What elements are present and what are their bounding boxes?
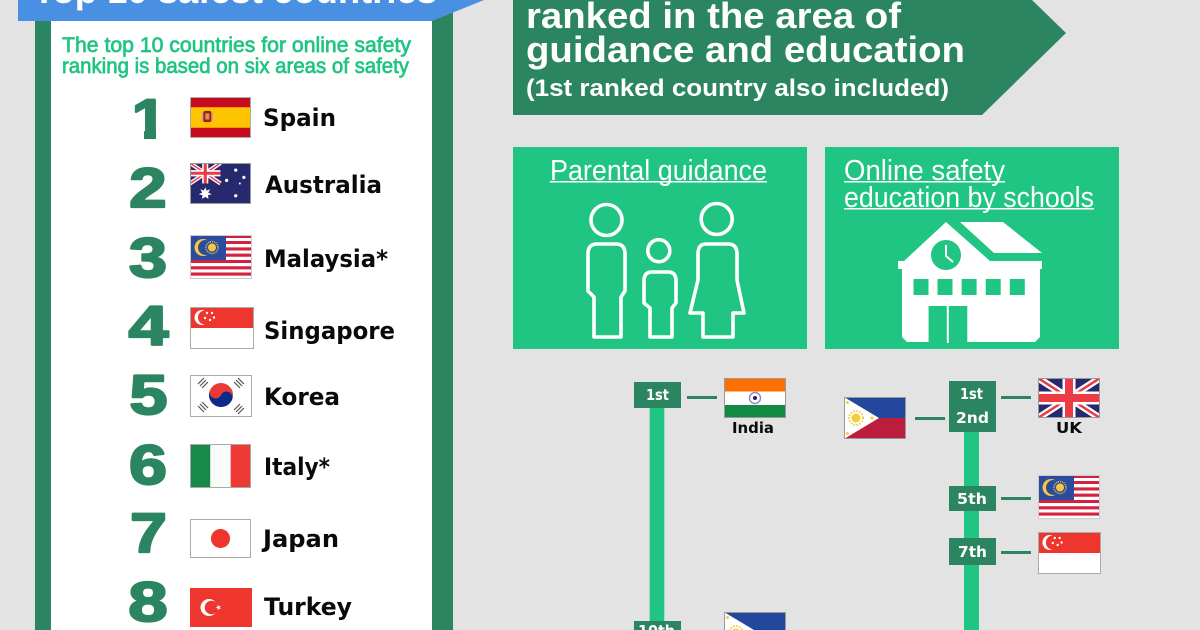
rank marker: 1st UK and 2nd Philippines: 2nd [956,409,989,427]
rank 5: Korea: Korea [264,383,340,411]
icon: school building [898,222,1042,343]
rank 4: Singapore: 4 [129,295,169,357]
heading arrow banner: guidance and education ranking: (1st ranked country also included) [526,75,949,102]
rank 5: Korea: 5 [130,364,167,427]
icon: family of three [588,204,744,337]
rank 5: Korea [130,364,340,427]
heading arrow banner: guidance and education ranking [513,0,1066,115]
rank 3: Malaysia: 3 [129,227,167,290]
rank 7: Japan: 7 [130,502,167,564]
rank 2: Australia [129,157,382,220]
rank 6: Italy: 6 [129,434,167,497]
heading: online safety education by schools: Online safety [844,155,1005,187]
text block: ranking description: The top 10 countries for online safety [62,34,411,57]
rank 4: Singapore [129,295,395,357]
rank 4: Singapore: Singapore [264,317,395,345]
panel: top 10 safest countries [18,0,484,630]
text block: ranking description [62,34,411,78]
text block: ranking description: ranking is based on six areas of safety [62,55,409,78]
rank marker: 1st India [634,378,786,437]
rank 7: Japan: Japan [261,525,339,553]
rank marker: 10th Philippines [634,612,786,630]
rank 8: Turkey: Turkey [264,593,352,621]
rank marker: 1st India: 1st [646,386,669,404]
heading: online safety education by schools [844,155,1094,214]
heading: parental guidance: Parental guidance [550,155,767,187]
rank marker: 7th Singapore [949,532,1101,574]
timeline: parental guidance ranks [634,378,786,630]
rank 3: Malaysia: Malaysia* [264,245,388,273]
rank marker: 5th Malaysia: 5th [957,490,987,508]
heading arrow banner: guidance and education ranking: guidance and education [526,29,965,70]
rank 2: Australia: Australia [265,171,382,199]
heading banner: top 10 safest countries [18,0,484,21]
rank marker: 1st UK and 2nd Philippines: UK [1056,419,1083,437]
rank 2: Australia: 2 [129,157,167,220]
rank 1: Spain: 1 [132,89,166,150]
rank marker: 1st India: India [732,419,774,437]
rank 3: Malaysia [129,227,388,290]
rank 1: Spain [134,97,334,139]
rank marker: 7th Singapore: 7th [958,543,987,561]
rank marker: 5th Malaysia [949,475,1100,519]
rank marker: 1st UK and 2nd Philippines [844,378,1100,439]
panel: parental guidance [513,147,807,349]
rank 1: Spain: Spain [263,104,336,132]
rank 8: Turkey [128,571,352,630]
rank marker: 1st UK and 2nd Philippines: 1st [960,385,983,403]
timeline: school education ranks [844,378,1101,630]
heading: online safety education by schools: education by schools [844,182,1094,214]
rank 6: Italy: Italy* [264,453,330,481]
panel: online safety education by schools [825,147,1119,349]
rank 6: Italy [129,434,330,497]
rank 7: Japan [130,502,339,564]
